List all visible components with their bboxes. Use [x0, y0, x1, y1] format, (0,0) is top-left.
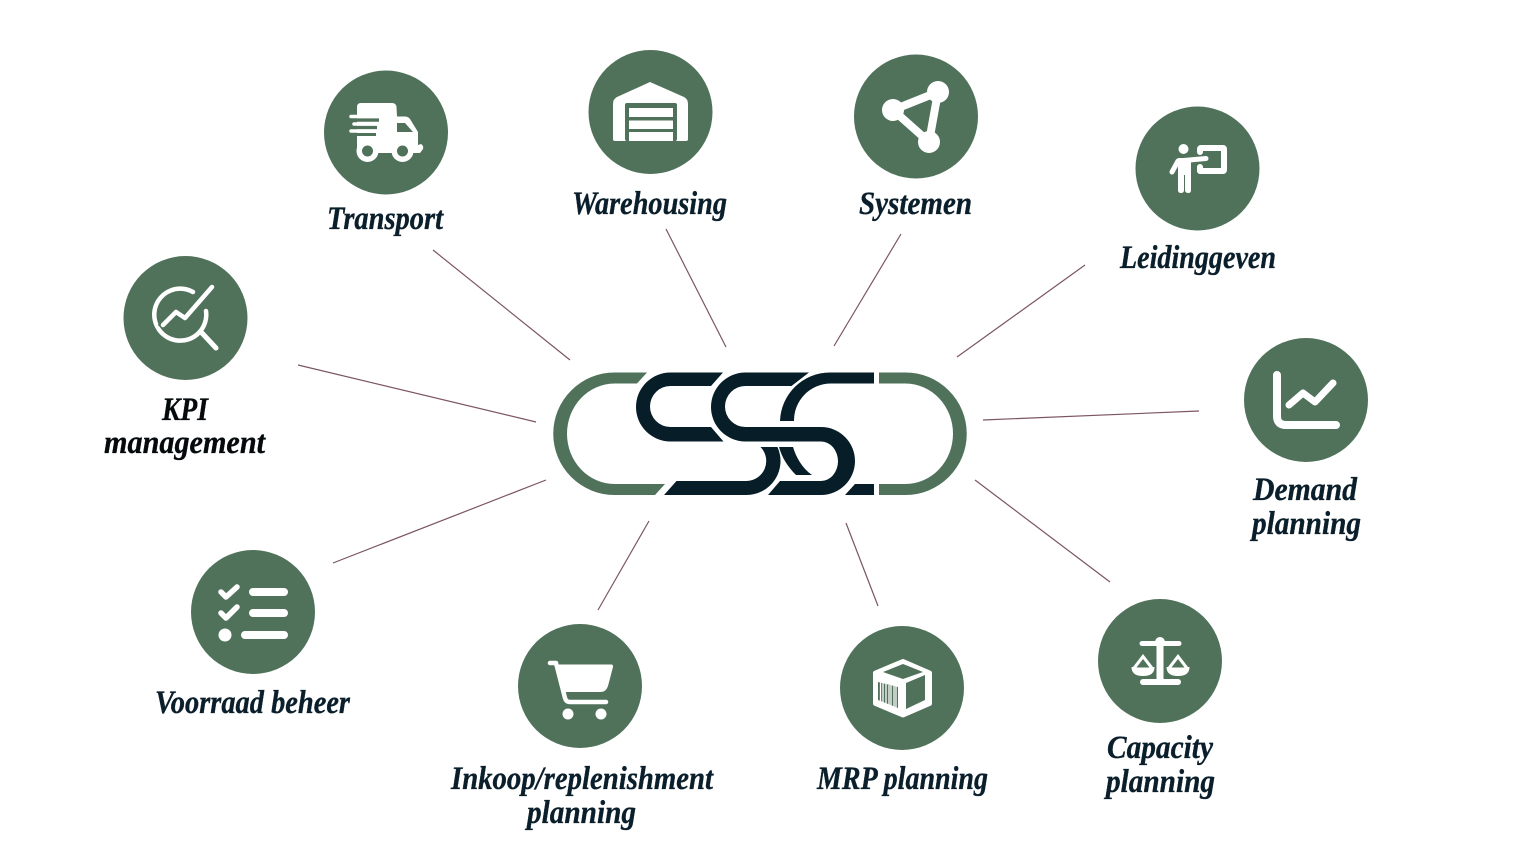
node: MRP planning	[816, 626, 988, 797]
node: Capacity planning	[1098, 599, 1222, 800]
label: Demand planning: Demand	[1252, 472, 1357, 508]
label: Demand planning: planning	[1249, 506, 1361, 542]
node: KPI management	[104, 256, 266, 461]
label: Leidinggeven: Leidinggeven	[1119, 240, 1276, 276]
node: Warehousing	[572, 50, 727, 222]
icon: magnifier with chart	[124, 256, 248, 380]
label: KPI management: management	[104, 425, 266, 461]
icon: warehouse	[588, 50, 712, 174]
label: MRP planning: MRP planning	[816, 761, 988, 797]
label: KPI management	[104, 392, 266, 461]
connector: Systemen	[834, 234, 901, 346]
label: Systemen: Systemen	[859, 186, 972, 222]
icon: presenter at board	[1136, 106, 1260, 230]
connector: Warehousing	[666, 229, 726, 347]
icon: delivery truck	[324, 70, 448, 194]
node: Leidinggeven	[1119, 106, 1276, 276]
icon: line chart	[1244, 338, 1368, 462]
connector: Transport	[433, 250, 570, 360]
label: Capacity planning: planning	[1103, 764, 1215, 800]
label: Transport: Transport	[327, 201, 444, 237]
node: Systemen	[854, 54, 978, 222]
label: Capacity planning	[1103, 730, 1215, 800]
connector: Inkoop/replenishment planning	[598, 521, 649, 610]
central logo	[553, 372, 967, 495]
icon: network triangle	[854, 54, 978, 178]
icon: barcode box	[840, 626, 964, 750]
node: Inkoop/replenishment planning	[450, 624, 714, 831]
node: Demand planning	[1244, 338, 1368, 542]
node: Voorraad beheer	[155, 550, 351, 721]
label: Warehousing: Warehousing	[572, 186, 727, 222]
label: Inkoop/replenishment planning	[450, 761, 714, 831]
icon: balance scales	[1098, 599, 1222, 723]
icon: checklist	[191, 550, 315, 674]
connector: Demand planning	[983, 411, 1199, 420]
label: Inkoop/replenishment planning: planning	[524, 795, 636, 831]
connector: Capacity planning	[975, 480, 1110, 582]
label: Voorraad beheer: Voorraad beheer	[155, 685, 351, 721]
connector: KPI management	[298, 365, 536, 422]
connector: MRP planning	[846, 523, 878, 606]
label: Capacity planning: Capacity	[1107, 730, 1213, 766]
connector: Voorraad beheer	[333, 480, 546, 563]
connector: Leidinggeven	[957, 265, 1085, 357]
label: KPI management: KPI	[161, 392, 209, 428]
label: Demand planning	[1249, 472, 1361, 542]
label: Inkoop/replenishment planning: Inkoop/replenishment	[450, 761, 714, 797]
icon: shopping cart	[518, 624, 642, 748]
node: Transport	[324, 70, 448, 237]
